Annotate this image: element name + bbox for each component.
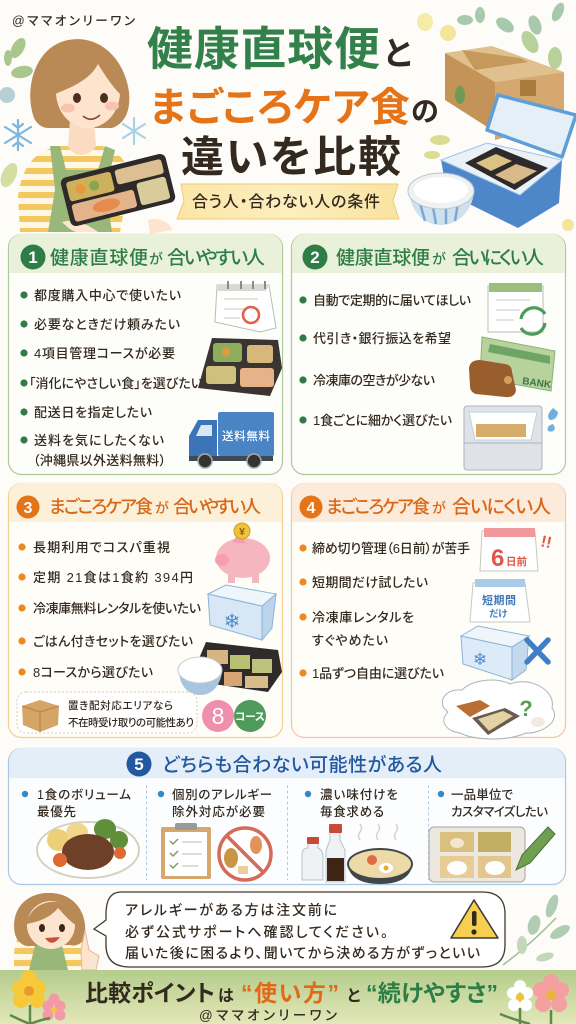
column 3: 濃い味付け: 濃い味付けを [320, 788, 398, 802]
panel 4 list: 1品ずつ自由に選びたい [312, 666, 444, 681]
number badge 1: 1 [28, 248, 38, 267]
title line 2: の [411, 96, 439, 127]
panel 2 heading [336, 247, 544, 269]
panel 3 heading: が [155, 500, 169, 516]
icon: freezer with cross: ❄ [473, 650, 487, 669]
handle top: @ママオンリーワン [12, 14, 135, 28]
panel 2 list: 代引き・銀行振込を希望 [313, 331, 451, 346]
number badge 3 [16, 496, 40, 518]
column 4: カスタマイズ: 一品単位で [451, 787, 513, 802]
column 2: アレルギー: 除外対応が必要 [172, 804, 265, 819]
column 4: カスタマイズ: カスタマイズしたい [451, 804, 548, 819]
panel 2 list: 1食ごとに細かく選びたい [313, 413, 452, 428]
footer flowers right [500, 974, 569, 1024]
panel 4 heading [326, 496, 551, 518]
panel 2 list: 自動で定期的に届いてほしい [313, 293, 471, 308]
number badge 5 [126, 752, 152, 776]
column 1: ボリューム [22, 787, 139, 878]
icon: left leaves [0, 35, 34, 190]
icon: calendar 短期間だけ [470, 579, 530, 622]
icon: wallet and bank card [469, 337, 555, 397]
icon: piggy bank and yen coin [215, 523, 270, 583]
number badge 4 [300, 496, 322, 518]
panel 3 heading: まごころケア食 [49, 497, 153, 517]
icon: wallet and bank card: BANK [522, 376, 552, 391]
panel 4: まごころケア食が合いにくい人 [292, 483, 566, 739]
speech bubble callout: アレルギーがある方は注文前に [125, 902, 337, 918]
icon: pencil [516, 827, 555, 870]
icon: ramen bowl [348, 824, 412, 884]
panel 4 list: 締め切り管理（6日前）が苦手 [312, 541, 470, 556]
panel 4 list: 冷凍庫レンタルを [312, 610, 414, 625]
panel 2 heading: 健康直球便 [336, 247, 430, 269]
icon: delivery truck [189, 412, 274, 468]
panel 1 list: 送料を気にしたくない [34, 433, 164, 448]
panel 3 list: 長期利用でコスパ重視 [33, 540, 170, 555]
icon: piggy bank and yen coin: ¥ [239, 527, 245, 538]
panel 1: 健康直球便が合いやすい人 [8, 234, 282, 474]
number badge 3: 3 [24, 500, 33, 517]
footer flowers left [10, 970, 66, 1024]
panel 1 heading: 健康直球便 [50, 247, 148, 269]
panel 3 list: ごはん付きセットを選びたい [33, 634, 193, 649]
number badge 2: 2 [310, 248, 320, 267]
column 4: カスタマイズ [429, 787, 555, 882]
number badge 1 [20, 244, 46, 270]
panel 1 list: 4項目管理コースが必要 [34, 346, 175, 361]
note: drop-off delivery: 不在時受け取りの可能性あり [68, 716, 194, 729]
icon: no allergens sign [219, 828, 271, 880]
number badge 5: 5 [134, 755, 144, 774]
speech bubble callout: 必ず公式サポートへ確認してください。 [125, 924, 388, 940]
illustration: woman with meal tray [18, 39, 172, 234]
icon: right leaves [417, 1, 574, 231]
icon: warning triangle [451, 900, 498, 938]
panel 5: どちらも合わない可能性がある人 [8, 748, 566, 884]
icon: bento tray [198, 338, 282, 396]
panel 4 heading: が [432, 500, 446, 516]
panel 1 list: 必要なときだけ頼みたい [34, 317, 180, 332]
speech bubble callout: 届いた後に困るより、聞いてから決める方がずっといい [125, 945, 481, 961]
column 3: 濃い味付け [302, 788, 412, 884]
illustration: blue cooler box with meals [441, 95, 576, 228]
column 1: ボリューム: 1食のボリューム [37, 787, 131, 802]
panel 3 list: 冷凍庫無料レンタルを使いたい [33, 601, 201, 616]
column dividers [146, 785, 428, 880]
title line 1: 健康直球便 [147, 23, 380, 75]
panel 1 heading [50, 247, 265, 269]
icon: calendar 6日前: !! [539, 533, 553, 552]
panel 2: 健康直球便が合いにくい人 [292, 234, 566, 474]
icon: snowflakes [5, 118, 145, 150]
badge: コース: コース [235, 711, 265, 723]
badge: 8: 8 [212, 703, 224, 729]
panel 2 list [299, 293, 471, 428]
icon: four-part tray [429, 827, 525, 882]
panel 3 list: 定期 21食は1食約 394円 [33, 570, 193, 585]
illustration: bento tray in hands [60, 153, 176, 227]
badge: 8 [202, 700, 234, 732]
footer headline [85, 980, 498, 1006]
title line 2: まごころケア食 [150, 86, 410, 130]
column 3: 濃い味付け: 毎食求める [320, 804, 384, 819]
footer headline: は [218, 988, 234, 1005]
column 1: ボリューム: 最優先 [37, 804, 76, 819]
icon: calendar 6日前: 日前 [506, 555, 527, 568]
icon: recurring calendar [488, 283, 545, 334]
illustration: pointing woman [14, 893, 99, 970]
title line 3: 違いを比較 [181, 134, 401, 182]
handle bottom: @ママオンリーワン [199, 1008, 337, 1023]
number badge 2 [302, 244, 328, 270]
icon: delivery truck: 送料無料 [222, 429, 270, 443]
panel 1 list [20, 288, 203, 468]
icon: open freezer [464, 406, 558, 470]
icon: clipboard [161, 823, 211, 879]
panel 3 heading [49, 497, 261, 517]
panel 4 heading: 合いにくい人 [452, 496, 551, 518]
icon: calendar 6日前: 6 [491, 545, 504, 572]
footer headline: “使い方” [241, 980, 339, 1006]
panel 3: まごころケア食が合いやすい人 [8, 483, 282, 738]
panel 2 heading: 合いにくい人 [452, 247, 544, 269]
icon: calendar with circle [215, 281, 276, 332]
panel 4 list [299, 541, 470, 681]
icon: calendar 短期間だけ: 短期間 [482, 593, 516, 607]
footer band [0, 970, 576, 1024]
panel 1 list: 都度購入中心で使いたい [34, 288, 181, 303]
panel 2 list: 冷凍庫の空きが少ない [313, 373, 435, 388]
number badge 4: 4 [307, 500, 316, 517]
panel 1 heading: 合いやすい人 [167, 247, 265, 269]
panel 1 list: 配送日を指定したい [34, 405, 152, 420]
ribbon subtitle: 合う人・合わない人の条件 [192, 193, 380, 211]
footer headline: と [347, 987, 360, 1005]
illustration: rice bowl [408, 173, 474, 225]
illustration: cardboard box [445, 46, 564, 140]
note: drop-off delivery: 置き配対応エリアなら [68, 699, 173, 712]
icon: leaf sprig [503, 893, 572, 965]
panel 5 heading: どちらも合わない可能性がある人 [162, 754, 442, 776]
panel 3 list: 8コースから選びたい [33, 665, 153, 680]
icon: freezer with cross [461, 626, 548, 680]
icon: thought cloud with meal: ? [519, 696, 533, 721]
panel 3 list [18, 540, 201, 680]
panel 1 heading: が [149, 251, 163, 267]
speech bubble callout [94, 892, 505, 967]
note: drop-off delivery [17, 692, 197, 733]
panel 1 list: （沖縄県以外送料無料） [33, 453, 166, 468]
icon: chest freezer: ❄ [224, 611, 240, 633]
panel 2 heading: が [432, 251, 446, 267]
icon: tray and rice bowl [178, 642, 282, 695]
footer headline: “続けやすさ” [366, 980, 498, 1006]
badge: コース [234, 700, 266, 732]
icon: calendar 6日前 [480, 528, 553, 572]
column 2: アレルギー [158, 788, 272, 880]
ribbon subtitle [177, 184, 399, 219]
footer headline: 比較ポイント [85, 980, 215, 1006]
icon: condiment bottles [302, 824, 345, 882]
panel 3 heading: 合いやすい人 [173, 497, 261, 517]
panel 1 list: 「消化にやさしい食」を選びたい [29, 376, 203, 391]
icon: thought cloud with meal [442, 680, 555, 739]
panel 4 heading: まごころケア食 [326, 497, 430, 517]
icon: calendar 短期間だけ: だけ [489, 609, 507, 620]
title line 1: と [384, 35, 412, 72]
column 2: アレルギー: 個別のアレルギー [172, 788, 272, 802]
icon: hamburg plate [37, 819, 139, 878]
panel 4 list: 短期間だけ試したい [312, 575, 428, 590]
panel 4 list: すぐやめたい [312, 633, 388, 648]
icon: chest freezer [208, 585, 276, 640]
